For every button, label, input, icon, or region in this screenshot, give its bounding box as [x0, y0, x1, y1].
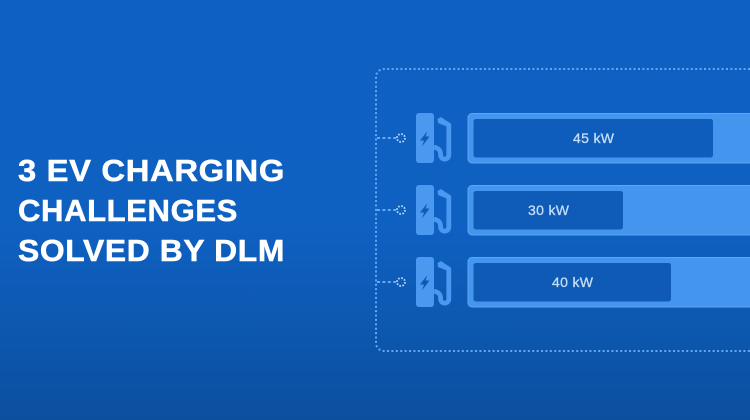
bar 1 — [468, 114, 750, 163]
dotted system frame — [376, 69, 750, 351]
title — [18, 153, 285, 268]
bar 3 — [468, 258, 750, 307]
bar 2 — [468, 186, 750, 235]
title: CHALLENGES — [18, 193, 238, 228]
icon: charging station 3 — [416, 257, 450, 307]
icon: charging station 1 — [416, 113, 450, 163]
connector 1 — [377, 134, 405, 142]
title: SOLVED BY DLM — [18, 233, 285, 268]
connector 2 — [377, 206, 405, 214]
title: 3 EV CHARGING — [18, 153, 285, 188]
bar 3: 40 kW — [552, 274, 594, 290]
bar 1: 45 kW — [573, 130, 615, 146]
bar 2: 30 kW — [528, 202, 570, 218]
row 2: charger and 30 kW bar — [377, 185, 750, 235]
row 3: charger and 40 kW bar — [377, 257, 750, 307]
icon: charging station 2 — [416, 185, 450, 235]
row 1: charger and 45 kW bar — [377, 113, 750, 163]
connector 3 — [377, 278, 405, 286]
